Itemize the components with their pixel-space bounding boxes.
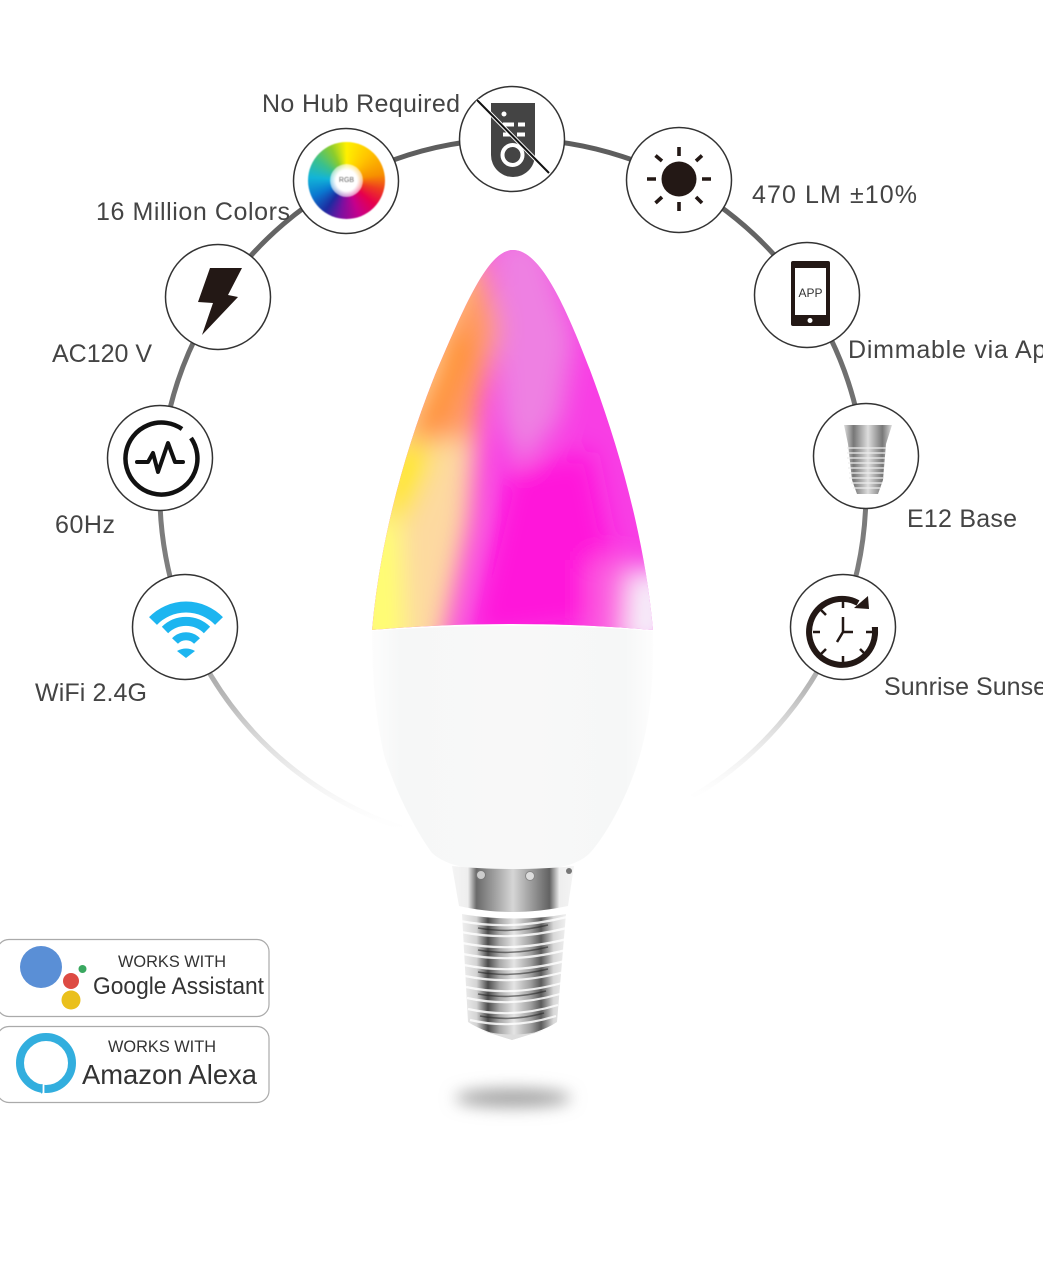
feature: RGB circle [294,128,398,234]
badge: Google Assistant: WORKS WITH [118,952,226,971]
badge: Amazon Alexa: WORKS WITH [108,1037,216,1056]
candle bulb [372,250,653,1040]
feature: app phone [754,242,860,348]
feature: voltage bolt [166,244,270,350]
feature: no hub required [460,86,564,192]
feature: E12 base [814,404,918,508]
icon: RGB colour wheel [308,142,385,219]
badge: Amazon Alexa [0,1026,269,1102]
label: 470 LM: 470 LM ±10% [752,181,917,209]
icon: RGB colour wheel: RGB [339,177,354,184]
feature: wifi [132,574,238,680]
bulb white body [372,626,653,871]
feature: frequency pulse [108,406,212,510]
feature: brightness sun [626,128,732,232]
label: 16 million colors: 16 Million Colors [96,198,290,226]
bulb colour glass [372,250,653,630]
badge: Google Assistant [0,940,269,1016]
feature: app phone: APP [798,286,823,300]
label: E12 base: E12 Base [907,505,1017,533]
label: WiFi 2.4G: WiFi 2.4G [35,679,147,707]
connecting ring [160,139,866,828]
label: no hub required: No Hub Required [262,90,460,118]
bulb screw thread [460,914,567,1040]
bulb floor shadow [455,1089,571,1107]
label: AC120 V: AC120 V [52,340,152,368]
badge: Amazon Alexa: Amazon Alexa [82,1059,257,1090]
label: 60Hz: 60Hz [55,511,115,539]
bulb metal collar [452,866,574,912]
badge: Google Assistant: Google Assistant [93,973,264,1000]
feature: sunrise clock [790,574,896,680]
